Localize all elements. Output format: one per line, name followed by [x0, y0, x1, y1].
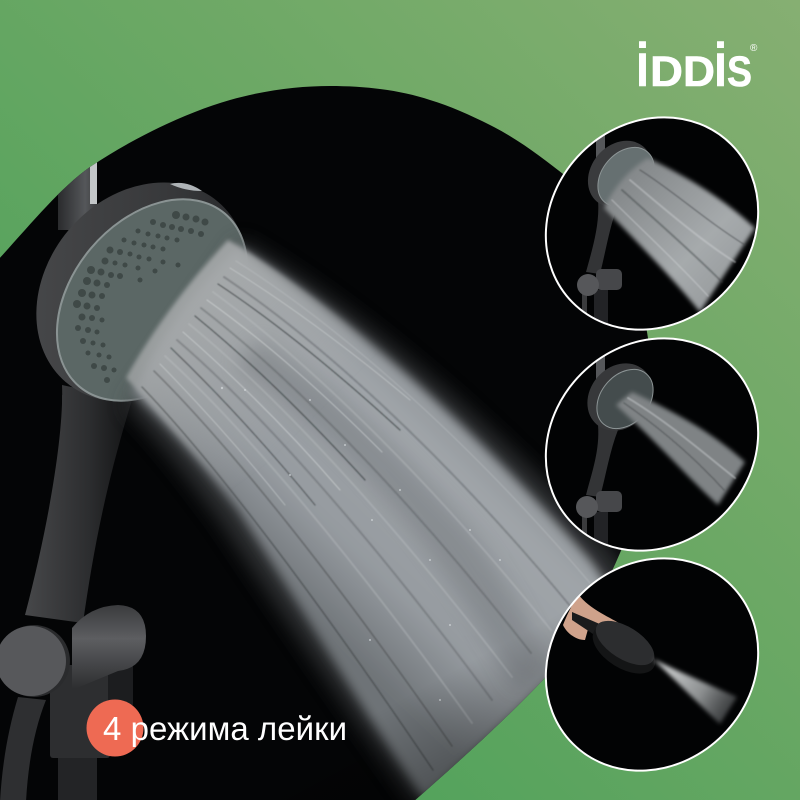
logo: IDDIS: D: [650, 48, 683, 96]
photo 3: jet spray mode with hand: [544, 557, 760, 772]
logo: IDDIS: i: [714, 31, 727, 99]
caption text: 4 режима лейки: [103, 710, 347, 747]
darker central band: [235, 340, 550, 690]
shower head body: [36, 182, 239, 400]
thumbnail spray: [604, 158, 755, 312]
photo 1: wide spray mode: [544, 116, 760, 331]
caption: 4 modes: [86, 700, 347, 756]
logo: IDDIS: i: [636, 31, 649, 99]
hand: [563, 596, 618, 640]
black shower head: [572, 612, 656, 674]
thumbnail 3 border: [502, 515, 800, 800]
thumbnail pole and handle: [577, 130, 622, 332]
thumbnail pole and handle: [576, 352, 622, 552]
hose: [0, 697, 46, 800]
thumbnail head: [587, 363, 654, 430]
jet spray: [653, 659, 737, 724]
thumbnail 1 border: [502, 74, 800, 373]
photo 2: narrow spray mode: [544, 337, 760, 552]
logo: IDDIS: S: [727, 48, 752, 96]
bright spray near the head: [124, 238, 346, 470]
orange number badge: [86, 700, 144, 756]
thumbnail 2 border: [502, 295, 800, 594]
shower head face with nozzles: [56, 198, 247, 402]
thumbnail spray: [616, 392, 745, 505]
hand shower handle: [25, 385, 132, 623]
logo: IDDIS: [636, 31, 758, 99]
logo: IDDIS: ®: [750, 43, 758, 54]
panel: main black photo blob: [0, 86, 648, 800]
shower pole: [58, 160, 97, 800]
wall bracket: [0, 605, 146, 758]
main water spray: [120, 236, 620, 800]
water droplets: [221, 387, 501, 701]
thumbnail head: [588, 140, 654, 205]
water streaks: [142, 261, 590, 770]
logo: IDDIS: D: [683, 48, 715, 96]
